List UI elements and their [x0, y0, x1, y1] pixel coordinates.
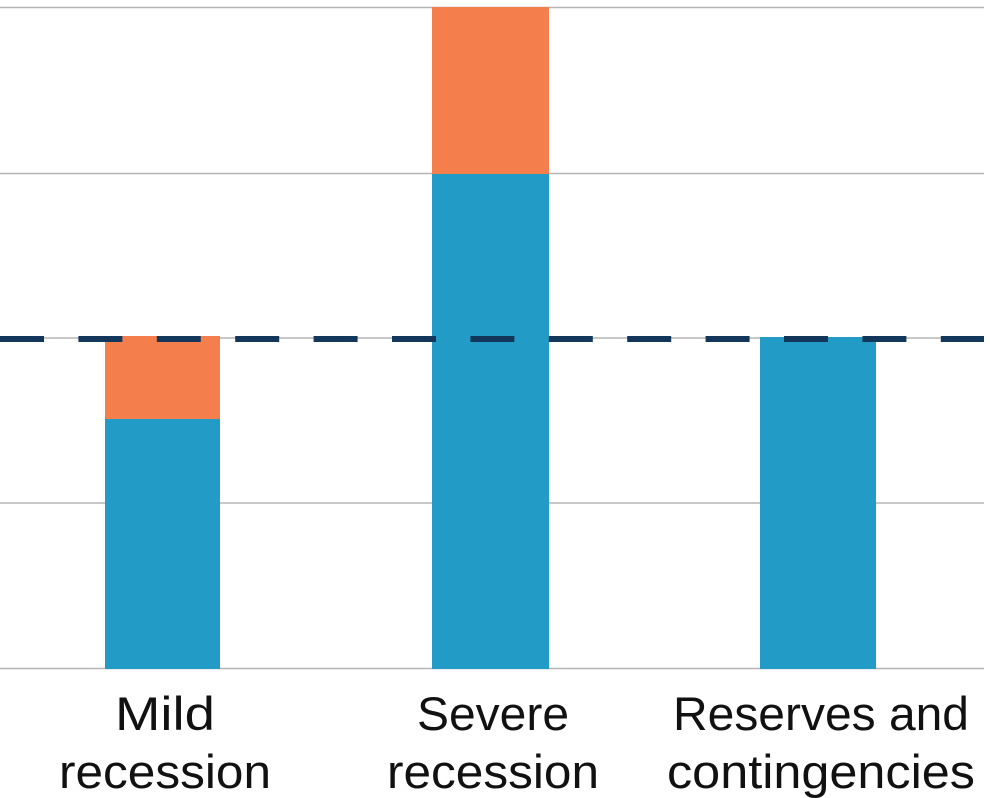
- label: mild recession: Mild: [115, 687, 215, 740]
- label: reserves and contingencies: Reserves and: [673, 687, 969, 740]
- label: mild recession: recession: [59, 745, 271, 798]
- label: reserves and contingencies: contingencies: [667, 745, 975, 798]
- label: severe recession: Severe: [417, 687, 569, 740]
- label: severe recession: recession: [387, 745, 599, 798]
- dashed reference line: [0, 336, 984, 342]
- bar: reserves and contingencies: [760, 337, 876, 669]
- label: reserves and contingencies: [667, 687, 975, 798]
- bar: severe recession: [432, 7, 549, 669]
- label: severe recession: [387, 687, 599, 798]
- label: mild recession: [59, 687, 271, 798]
- bar: mild recession: [105, 336, 220, 669]
